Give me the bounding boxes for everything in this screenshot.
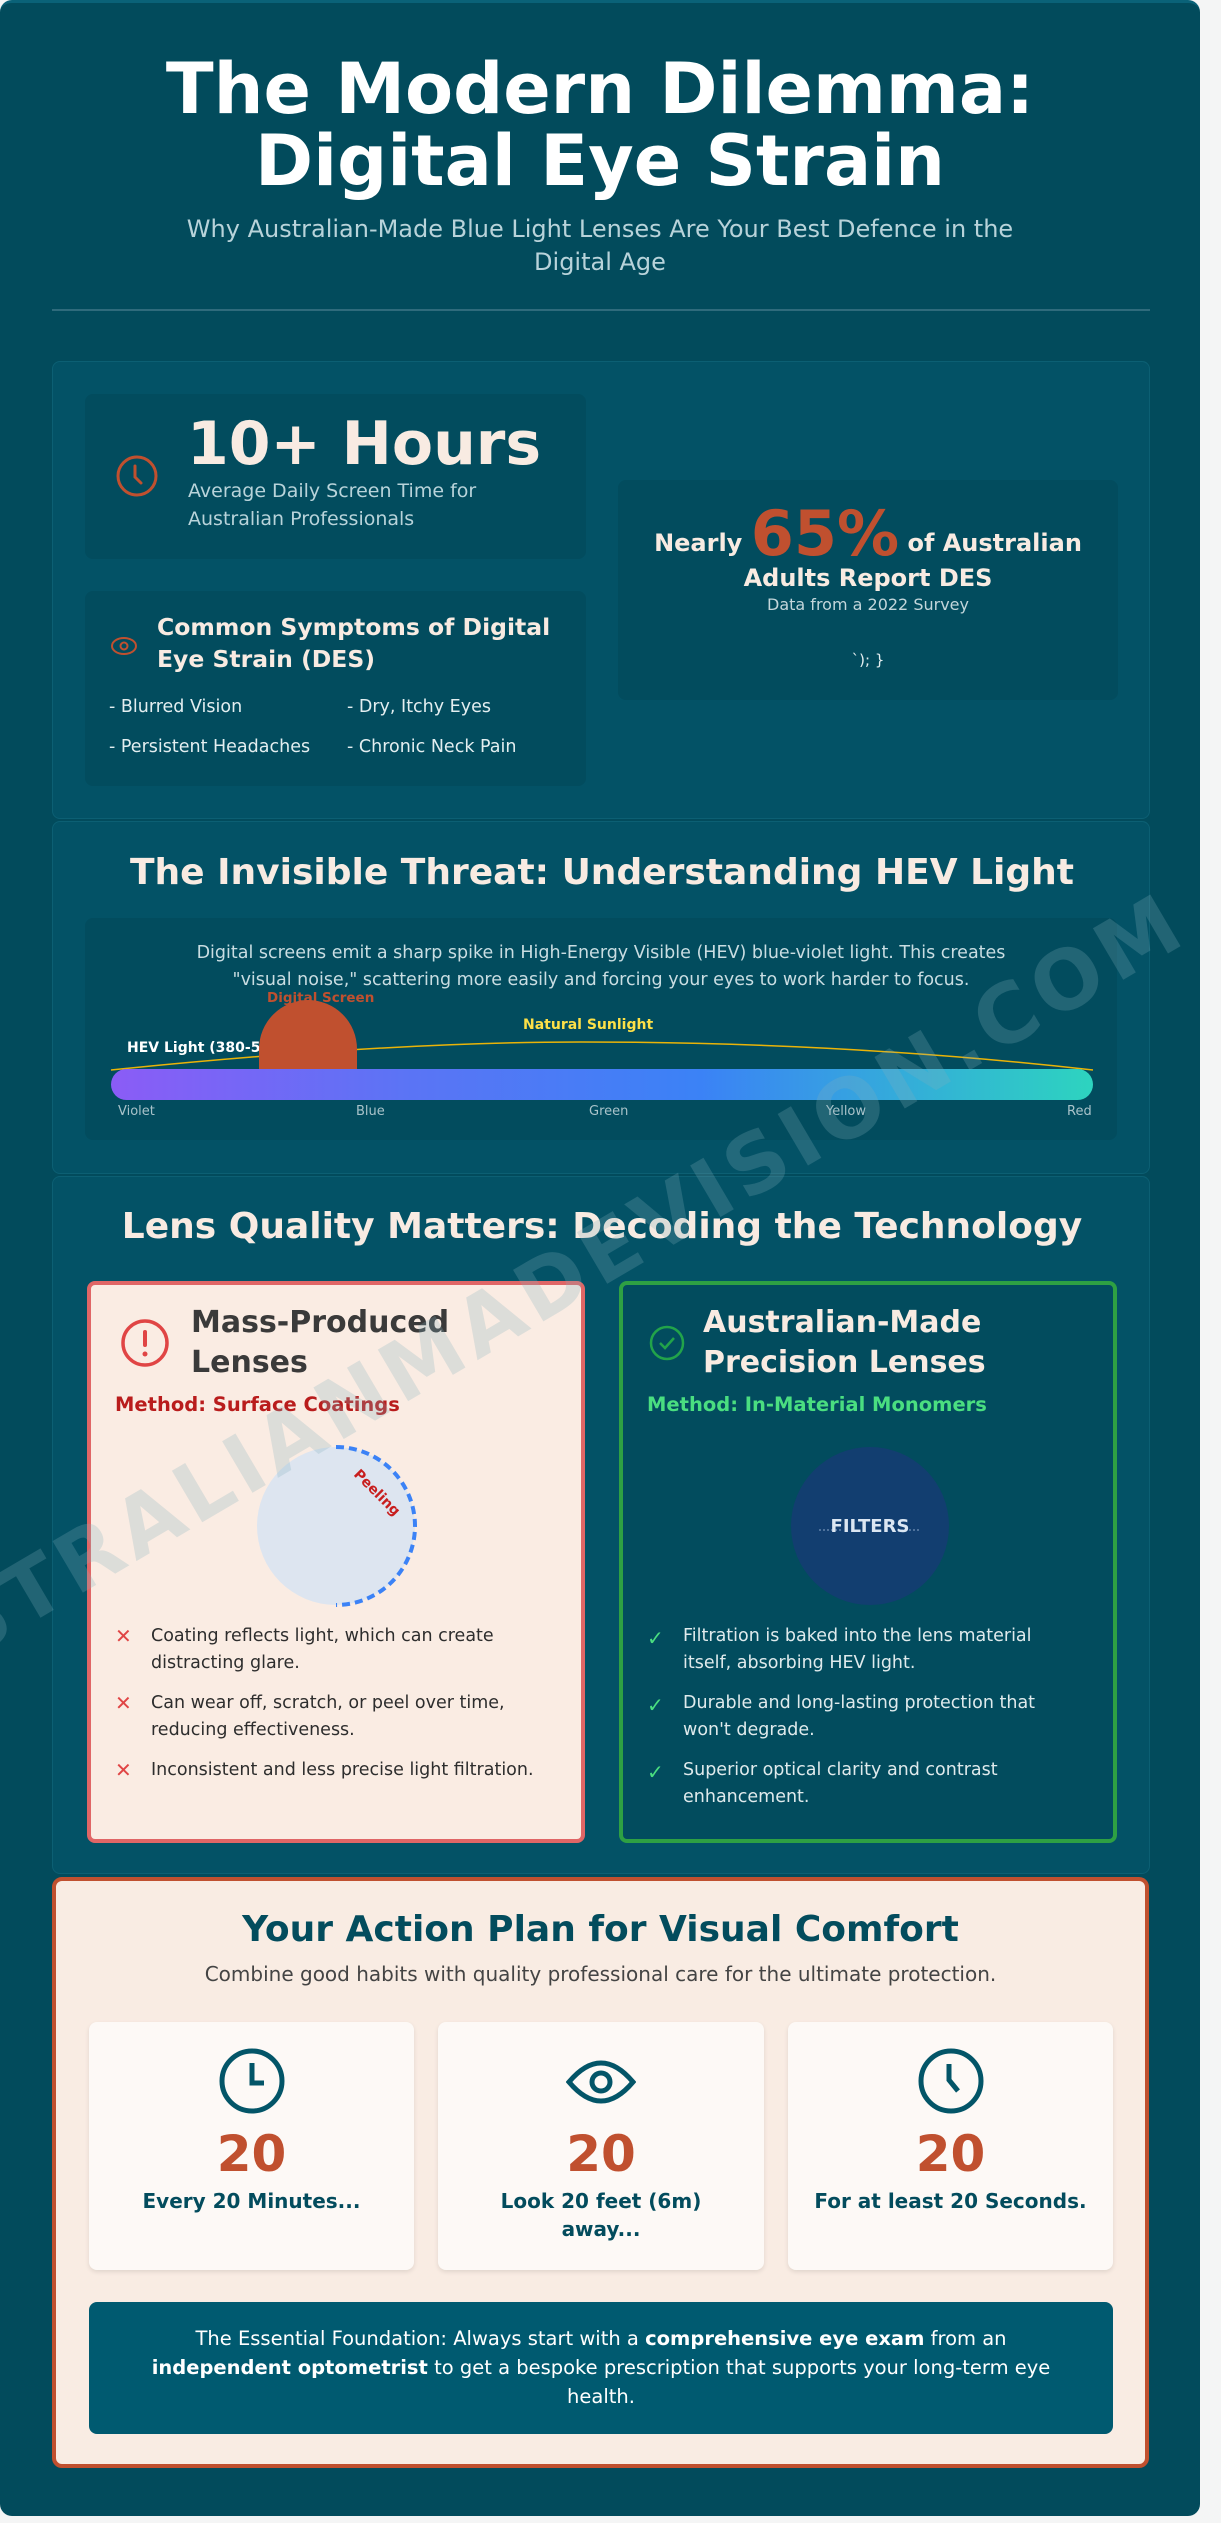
icon: clock: [918, 2048, 984, 2114]
method: Method: In-Material Monomers: [647, 1393, 987, 1416]
heading: australian-made: Australian-Made Precision Lenses: [703, 1305, 986, 1380]
card: screen time: [85, 394, 586, 559]
subtitle: action plan: Combine good habits with quality professional care for the ultimate protection.: [205, 1962, 996, 1986]
label: HEV light: HEV Light (380-5: [127, 1040, 260, 1056]
panel: statistics: [52, 361, 1150, 819]
card: 20 feet: Look 20 feet (6m) away...: [501, 2189, 701, 2241]
card: 20 minutes: 20: [217, 2125, 286, 2183]
title: [166, 48, 1034, 202]
card: australian-made: ✓: [647, 1626, 664, 1650]
icon: eye: [566, 2060, 636, 2104]
card: symptoms: - Persistent Headaches: [109, 737, 310, 757]
card: 65% stat: [618, 480, 1118, 700]
card: mass-produced: [87, 1281, 585, 1843]
spectrum chart: Violet: [118, 1104, 155, 1119]
card: symptoms: [85, 591, 586, 786]
heading: HEV: The Invisible Threat: Understanding HEV Light: [130, 852, 1074, 893]
card: 20 seconds: For at least 20 Seconds.: [814, 2189, 1087, 2213]
panel: lens quality: [52, 1176, 1150, 1874]
symptoms list: [109, 697, 516, 757]
card: 20 seconds: 20: [916, 2125, 985, 2183]
icon: warning: [121, 1319, 169, 1367]
card: australian-made: Filtration is baked into the lens material itself, absorbing HEV light.: [683, 1626, 1032, 1673]
method: Method: Surface Coatings: [115, 1393, 400, 1416]
spectrum chart: Blue: [356, 1104, 385, 1119]
card: australian-made: Durable and long-lasting protection that won't degrade.: [683, 1693, 1035, 1740]
description: Digital screens emit a sharp spike in High-Energy Visible (HEV) blue-violet light. This creates "visual noise," scattering more easily and forcing your eyes to work harder to focus.: [197, 943, 1005, 990]
callout: foundation: The Essential Foundation: Always start with a comprehensive eye exam from an independent optometrist to get a bespoke prescription that supports your long-term eye health.: [152, 2327, 1050, 2408]
card: mass-produced: ✕: [115, 1758, 132, 1782]
sunlight curve: [110, 1041, 1094, 1071]
card: 20 feet: 20: [566, 2125, 636, 2183]
diagram: filter lens: [791, 1447, 949, 1605]
spectrum chart: Green: [589, 1104, 628, 1119]
spectrum chart: Red: [1067, 1104, 1092, 1119]
card: symptoms: - Blurred Vision: [109, 697, 242, 717]
card: australian-made: ✓: [647, 1693, 664, 1717]
label: natural sunlight: Natural Sunlight: [523, 1017, 653, 1033]
stat: 65%: Nearly 65% of Australian: [654, 497, 1082, 570]
list: drawbacks: [115, 1624, 534, 1782]
panel: action plan: [52, 1877, 1149, 2468]
subtitle: Why Australian-Made Blue Light Lenses Are Your Best Defence in the Digital Age: [187, 215, 1013, 276]
spectrum bar: [111, 1069, 1093, 1100]
card: mass-produced: Inconsistent and less precise light filtration.: [151, 1760, 534, 1780]
icon: eye: [111, 637, 137, 655]
icon: check: [650, 1326, 684, 1360]
card: australian-made: Superior optical clarity and contrast enhancement.: [683, 1760, 998, 1807]
card: australian-made: ✓: [647, 1760, 664, 1784]
card: mass-produced: ✕: [115, 1624, 132, 1648]
title: Digital Eye Strain: [255, 120, 945, 202]
heading: action plan: Your Action Plan for Visual Comfort: [242, 1909, 959, 1950]
diagram: filter lens: FILTERS: [831, 1516, 909, 1537]
chart box: [85, 918, 1117, 1140]
card: 20 minutes: Every 20 Minutes...: [142, 2189, 360, 2213]
card: 20 seconds: [788, 2022, 1113, 2270]
callout: foundation: [89, 2302, 1113, 2434]
card: 65% stat: Adults Report DES: [744, 564, 992, 592]
card: mass-produced: Can wear off, scratch, or peel over time, reducing effectiveness.: [151, 1693, 505, 1740]
heading: mass-produced: Mass-Produced Lenses: [191, 1305, 449, 1380]
stat caption: Average Daily Screen Time for Australian Professionals: [188, 480, 476, 530]
card: symptoms: - Dry, Itchy Eyes: [347, 697, 491, 717]
card: symptoms: - Chronic Neck Pain: [347, 737, 516, 757]
card: australian-made: [619, 1281, 1117, 1843]
card: mass-produced: ✕: [115, 1691, 132, 1715]
list: benefits: [647, 1626, 1035, 1807]
spectrum labels: [118, 1104, 1092, 1119]
heading: lens quality: Lens Quality Matters: Decoding the Technology: [122, 1206, 1082, 1247]
source note: Data from a 2022 Survey: [767, 595, 969, 614]
card: 20 feet: [438, 2022, 764, 2270]
diagram: coated lens: Peeling: [350, 1467, 403, 1519]
panel: HEV light: [52, 821, 1150, 1174]
icon: clock: [116, 456, 158, 496]
stat: 10+ hours: 10+ Hours: [187, 409, 541, 479]
label: digital screen: Digital Screen: [267, 990, 374, 1006]
spectrum chart: Yellow: [826, 1104, 866, 1119]
card: 65% stat: `); }: [852, 651, 884, 669]
symptoms heading: Common Symptoms of Digital Eye Strain (DES): [157, 613, 550, 673]
digital screen spike: [259, 1000, 357, 1072]
icon: clock: [220, 2048, 284, 2114]
diagram: coated lens: [257, 1445, 417, 1607]
card: 20 minutes: [89, 2022, 414, 2270]
card: mass-produced: Coating reflects light, which can create distracting glare.: [151, 1626, 494, 1673]
title: The Modern Dilemma:: [166, 48, 1034, 130]
spectrum chart: [110, 990, 1094, 1119]
